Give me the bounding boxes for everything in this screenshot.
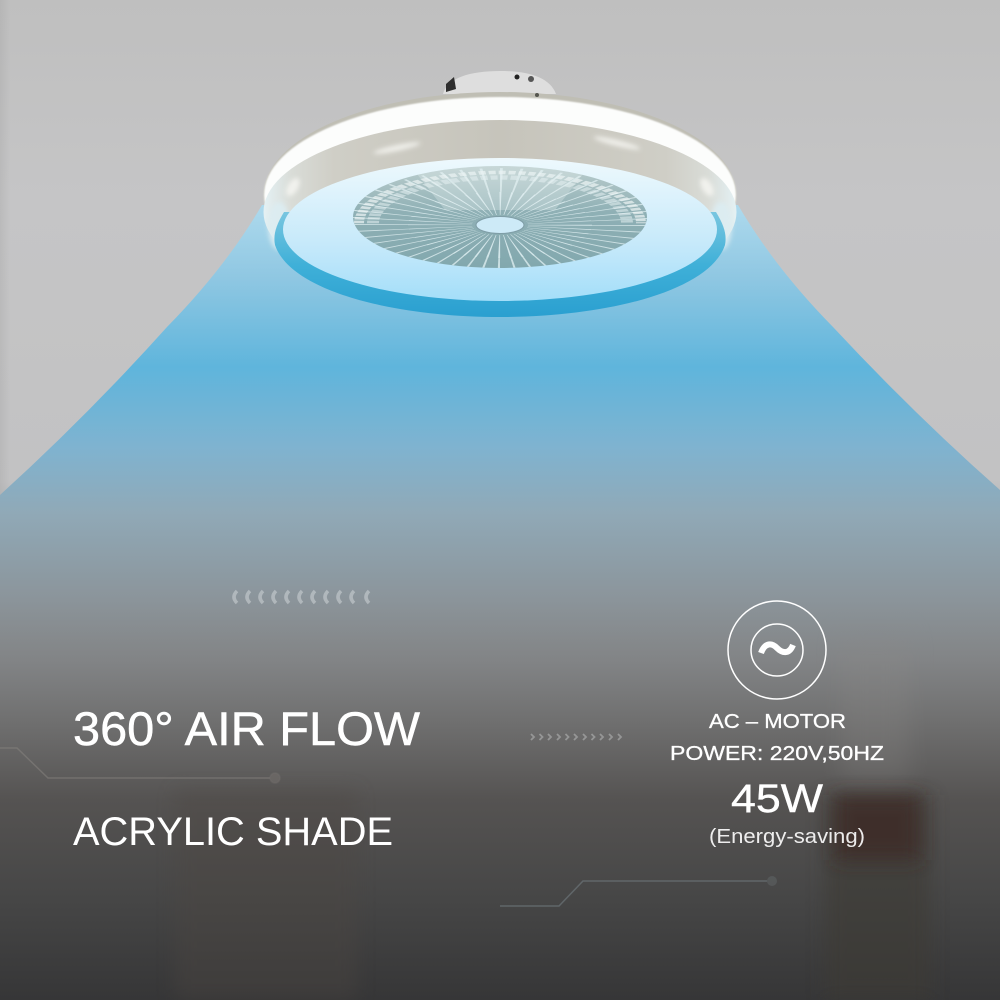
heading: 360 air flow: 360° AIR FLOW — [73, 702, 421, 755]
circuit line left — [0, 748, 280, 783]
lower glow left — [268, 202, 290, 250]
decorative chevrons right — [531, 734, 621, 740]
text: acrylic shade: ACRYLIC SHADE — [73, 810, 393, 854]
air flow cone — [0, 205, 1000, 660]
fan hub — [476, 216, 524, 234]
fan grille — [353, 165, 647, 270]
text: energy saving: (Energy-saving) — [709, 826, 865, 848]
housing body — [264, 120, 736, 304]
glowing white band — [264, 97, 736, 293]
circuit line right — [500, 876, 777, 906]
ceiling fan — [264, 71, 736, 317]
text: AC motor: AC – MOTOR — [709, 710, 846, 733]
mounting bracket — [443, 71, 556, 94]
decorative chevrons left — [234, 591, 369, 603]
text: wattage: 45W — [731, 777, 823, 821]
housing top rim — [264, 92, 736, 298]
blue ring — [274, 212, 726, 317]
lower glow right — [710, 202, 732, 250]
mount screw — [535, 93, 539, 97]
text: power: POWER: 220V,50HZ — [670, 742, 884, 765]
housing highlights — [284, 134, 716, 198]
inner light-blue diffuser — [283, 158, 717, 301]
icon: AC motor — [728, 601, 826, 699]
